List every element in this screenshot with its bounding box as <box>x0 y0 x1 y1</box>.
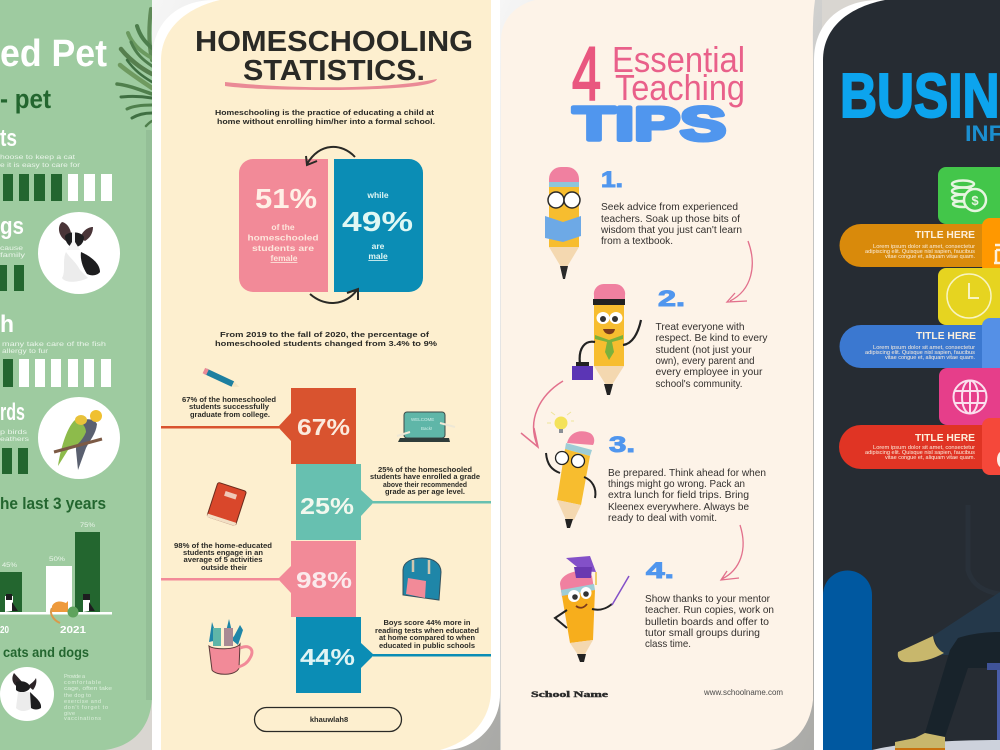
arrow: tip 3 to 4 <box>721 525 743 580</box>
heading: last 3 years: he last 3 years <box>0 494 106 513</box>
heading: pet title: ed Pet <box>0 33 107 75</box>
blue pillar <box>823 570 872 750</box>
text: care advice: the dog to <box>64 693 91 699</box>
heading: 4 essential teaching: Teaching <box>615 67 745 108</box>
stat: 67% <box>161 388 356 464</box>
heading: 4 essential teaching <box>572 32 745 117</box>
icon: coins: $ <box>971 193 979 208</box>
icon: pencil with book <box>545 167 581 279</box>
text: care advice <box>64 674 112 722</box>
section: birds <box>0 399 30 474</box>
section: birds: p birds <box>0 429 28 436</box>
stat: 25%: grade as per age level. <box>385 487 465 496</box>
tip 3: 3. <box>609 432 635 457</box>
section: cats: ts <box>0 125 17 152</box>
stat: 98%: outside their <box>201 563 247 572</box>
tip 1: 1. <box>601 167 623 192</box>
tip 2: school's community. <box>656 378 742 390</box>
sole <box>895 748 945 750</box>
icon: dog in circle <box>38 212 120 294</box>
text: school name: School Name <box>531 689 608 699</box>
stat: 98%: 98% of the home-educated <box>174 541 272 550</box>
stat: 25%: 25% <box>300 493 354 519</box>
tip 2: respect. Be kind to every <box>656 332 768 344</box>
badge: author <box>254 708 402 732</box>
tip 3: extra lunch for field trips. Bring <box>608 489 749 501</box>
underline stroke <box>225 79 437 90</box>
icon: pencil with light bulb <box>546 412 595 528</box>
tip 3: Kleenex everywhere. Always be <box>608 501 749 513</box>
icon: backpack <box>403 558 441 600</box>
arrow: tip 2 to 3 <box>521 381 563 447</box>
text: care advice: Provide a <box>64 674 86 680</box>
text: definition <box>215 108 435 126</box>
tip 2: Treat everyone with <box>656 321 745 333</box>
chair post <box>997 670 1000 740</box>
text: definition: Homeschooling is the practice of educating a child at <box>215 108 435 117</box>
icon: laptop <box>397 412 455 442</box>
text: 2019 to 2020 change: From 2019 to the fall of 2020, the percentage of <box>220 330 430 339</box>
near leg <box>925 632 1000 737</box>
card: 51% female: homeschooled <box>248 232 318 242</box>
section: dogs <box>0 213 26 291</box>
tip 3: ready to deal with vomit. <box>608 512 717 524</box>
stat: 25% <box>296 464 491 540</box>
tip 3: Be prepared. Think ahead for when <box>608 467 766 479</box>
bar chart: pets by year <box>0 522 112 636</box>
pill: blue title: vitae congue et, aliquam vitae quam. <box>885 355 975 361</box>
icon: bank fragment <box>994 245 1000 263</box>
stat: 44% <box>296 617 491 693</box>
section: birds: eathers <box>0 436 30 443</box>
text: website: www.schoolname.com <box>703 688 783 697</box>
text: definition: home without enrolling him/her into a formal school. <box>217 117 435 126</box>
section: birds: rds <box>0 399 25 426</box>
icon: graduate pencil with pointer <box>555 556 629 662</box>
card: 51% female <box>239 159 328 292</box>
tip 1: Seek advice from experienced <box>601 201 738 213</box>
pill: orange title <box>840 224 990 267</box>
text: care advice: don't forget to <box>64 705 108 711</box>
tip 2 <box>572 284 768 395</box>
text: care advice: cage, often take <box>64 686 112 692</box>
panel: pet statistics <box>0 0 152 750</box>
section: fish: h <box>0 311 14 338</box>
section: cats <box>0 125 112 201</box>
near shoe <box>895 733 945 748</box>
stat: 25%: students have enrolled a grade <box>370 472 480 481</box>
pill: blue title: TITLE HERE <box>916 331 976 342</box>
pill: blue title <box>840 325 990 368</box>
tile: pink globe <box>939 368 1000 425</box>
illustration: seated person <box>823 570 1000 750</box>
heading: homeschooling statistics: STATISTICS. <box>243 55 425 87</box>
panel: teaching tips <box>500 0 822 750</box>
tip 1: wisdom that you just can't learn <box>600 224 742 236</box>
stat: 44%: Boys score 44% more in <box>384 618 471 627</box>
tip 3: things might go wrong. Pack an <box>608 478 745 490</box>
tile: orange <box>982 218 1000 268</box>
stat: 67%: 67% of the homeschooled <box>182 395 276 404</box>
section: dogs: gs <box>0 213 24 240</box>
panel: business infographic <box>814 0 1000 750</box>
panel: homeschooling statistics <box>152 0 500 750</box>
stat: 98%: 98% <box>296 567 352 593</box>
pill: orange title: vitae congue et, aliquam vitae quam. <box>885 254 975 260</box>
icon: palm leaf <box>117 9 152 126</box>
icon: globe <box>954 380 986 414</box>
icon: birds in circle <box>38 397 120 479</box>
pill: red title <box>839 425 990 469</box>
pill: red title: vitae congue et, aliquam vitae quam. <box>885 455 975 461</box>
text: care advice: vaccinations <box>64 716 101 722</box>
far shoe <box>898 636 944 662</box>
text: care advice: give <box>64 711 75 717</box>
text: 2019 to 2020 change <box>215 330 437 348</box>
heading: homeschooling statistics <box>195 26 473 87</box>
stat: 44%: 44% <box>300 644 355 670</box>
tip 4: bulletin boards and offer to <box>645 616 769 628</box>
arrow: top curve <box>306 147 355 165</box>
stat: 25%: 25% of the homeschooled <box>378 465 472 474</box>
tip 1: from a textbook. <box>601 235 673 247</box>
heading: 4 essential teaching: Essential <box>612 39 745 80</box>
card: 51% female: female <box>271 253 298 263</box>
section: fish: allergy to fur <box>2 348 49 355</box>
tip 4: teacher. Run copies, work on <box>645 604 774 616</box>
icon: pencil with briefcase <box>572 284 641 395</box>
icon: small dog in circle <box>0 667 54 721</box>
pill: orange title: Lorem ipsum dolor sit amet, consectetur <box>873 244 975 250</box>
far leg <box>933 592 1000 655</box>
bar chart: pets by year: 50% <box>49 556 65 563</box>
card: 49% male: 49% <box>342 206 413 237</box>
heading: tips: TIPS <box>573 97 726 150</box>
tip 4: 4. <box>646 558 674 583</box>
tip 4: class time. <box>645 638 691 650</box>
pill: blue title: adipiscing elit. Quisque nisl sapien, faucibus <box>865 350 975 356</box>
stat: 98%: students engage in an <box>183 548 263 557</box>
pill: orange title: adipiscing elit. Quisque nisl sapien, faucibus <box>865 249 975 255</box>
stat: 67%: students successfully <box>189 402 270 411</box>
stat: 67%: graduate from college. <box>190 410 270 419</box>
tile: green money <box>938 167 1000 224</box>
subheading: pet: - pet <box>0 84 51 114</box>
tip 4: tutor small groups during <box>645 627 760 639</box>
section: dogs: family <box>0 252 26 259</box>
tip 2: every employee in your <box>656 366 763 378</box>
chair seat <box>987 663 1000 670</box>
tip 4: Show thanks to your mentor <box>645 593 770 605</box>
tile: red <box>982 418 1000 475</box>
stat: 44%: reading tests when educated <box>375 626 479 635</box>
heading: 4 essential teaching: 4 <box>572 32 601 117</box>
stat: 44%: at home compared to when <box>379 633 475 642</box>
section: cats: hoose to keep a cat <box>0 154 75 161</box>
section: fish <box>0 311 111 387</box>
icon: clock <box>947 274 991 318</box>
tip 1: teachers. Soak up those bits of <box>601 213 740 225</box>
card: 49% male: while <box>366 190 389 200</box>
tip 3 <box>546 412 766 528</box>
card: 49% male <box>334 159 423 292</box>
icon: pencil mug <box>209 619 252 674</box>
icon: dogs on axis <box>5 594 95 612</box>
text: care advice: comfortable <box>64 680 101 686</box>
icon: laptop: WELCOME <box>411 417 434 422</box>
icon: notebook <box>207 482 247 526</box>
icon: cat on axis <box>51 601 68 623</box>
stat: 67%: 67% <box>297 414 350 440</box>
card: 51% female: of the <box>271 222 295 232</box>
bar chart: pets by year: 2021 <box>60 624 86 636</box>
bar chart: pets by year: 20 <box>0 624 9 636</box>
icon: ball on axis <box>68 606 78 618</box>
card: 49% male: are <box>372 241 385 251</box>
tip 2: student (not just your <box>656 344 752 356</box>
stat: 44%: educated in public schools <box>379 641 475 650</box>
pill: red title: adipiscing elit. Quisque nisl sapien, faucibus <box>865 450 975 456</box>
arrow: bottom curve <box>310 289 358 303</box>
pill: orange title: TITLE HERE <box>915 230 975 241</box>
pill: red title: TITLE HERE <box>915 433 975 444</box>
heading: homeschooling statistics: HOMESCHOOLING <box>195 26 473 58</box>
pill: red title: Lorem ipsum dolor sit amet, consectetur <box>873 445 975 451</box>
card: 51% female: students are <box>252 243 314 253</box>
tile: yellow clock <box>938 268 1000 325</box>
bar chart: pets by year: 45% <box>2 562 17 569</box>
tip 2: 2. <box>658 286 685 311</box>
card: 51% female: 51% <box>255 183 317 214</box>
heading: cats and dogs: cats and dogs <box>3 644 89 660</box>
icon: laptop: Back! <box>421 426 432 431</box>
floor <box>872 740 1000 750</box>
tile: blue <box>982 318 1000 368</box>
tip 2: own), every parent and <box>656 355 755 367</box>
text: 2019 to 2020 change: homeschooled students changed from 3.4% to 9% <box>215 339 437 348</box>
card: 49% male: male <box>368 251 388 261</box>
section: cats: e it is easy to care for <box>0 162 81 169</box>
stat: 98% <box>161 541 356 617</box>
icon: pencil <box>203 368 240 390</box>
text: care advice: exercise and <box>64 699 101 705</box>
stat: 25%: above their recommended <box>383 480 467 489</box>
section: fish: many take care of the fish <box>2 341 107 348</box>
tip 1 <box>545 167 742 279</box>
pill: blue title: Lorem ipsum dolor sit amet, consectetur <box>873 345 975 351</box>
arrow: tip 1 to 2 <box>727 241 752 302</box>
bar chart: pets by year: 75% <box>80 522 95 529</box>
tip 4 <box>555 556 774 662</box>
section: dogs: cause <box>0 245 23 252</box>
badge: author: khauwlah8 <box>310 715 348 724</box>
chair back <box>968 505 1000 594</box>
stat: 98%: average of 5 activities <box>184 555 262 564</box>
